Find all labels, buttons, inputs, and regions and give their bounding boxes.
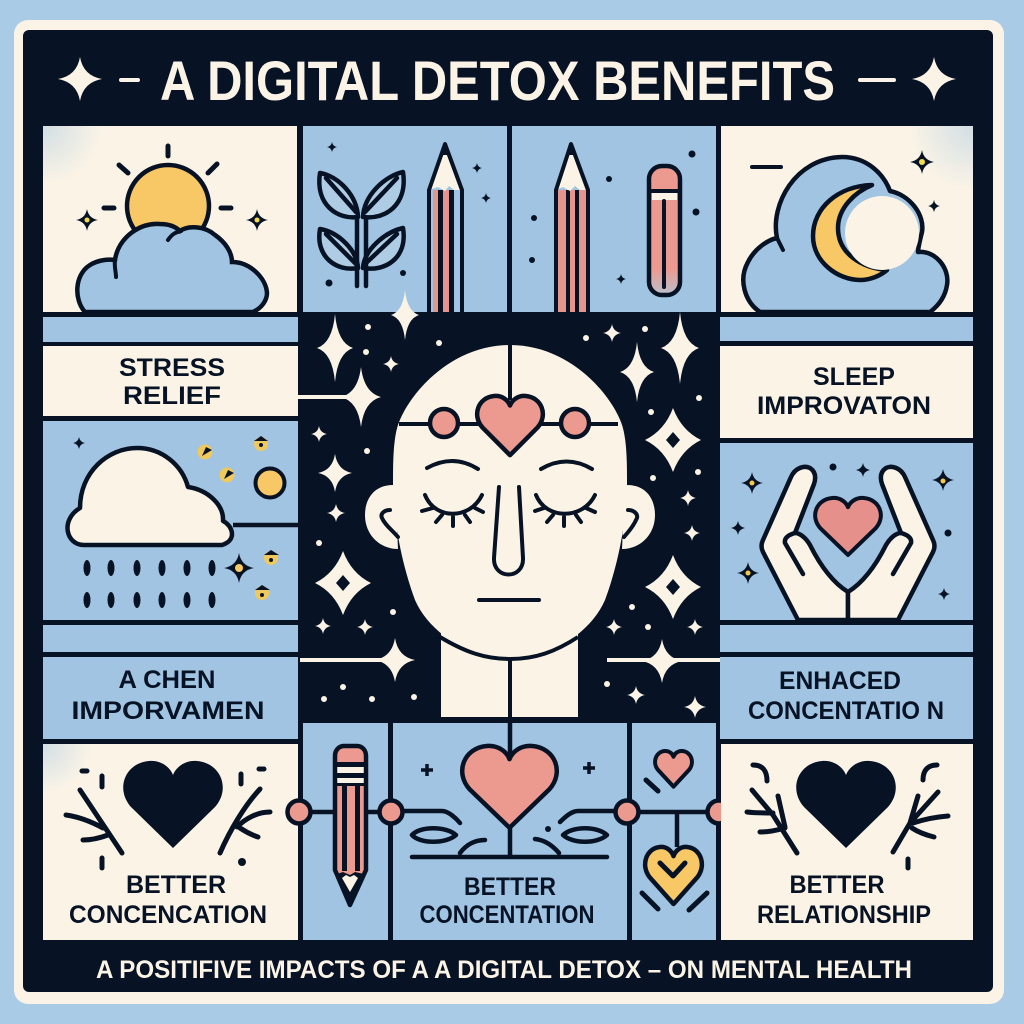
face <box>393 345 627 658</box>
icon: right twig <box>893 765 948 868</box>
panel: better relationship <box>721 744 973 940</box>
title decoration left <box>58 57 140 101</box>
icon: sun dot <box>256 468 284 498</box>
icon: left hand <box>762 467 848 620</box>
text: label: BETTER <box>790 871 884 899</box>
strip: right upper <box>720 317 973 341</box>
nose <box>494 487 523 574</box>
panel: rain cloud <box>43 421 298 620</box>
mouth <box>479 598 539 602</box>
icon: small marks <box>529 150 700 284</box>
icon: pencil <box>556 142 588 312</box>
icon: cloud <box>743 157 947 312</box>
strip: left upper <box>43 317 298 342</box>
text: label: BETTER <box>126 871 226 899</box>
icon: sparkles <box>76 209 268 231</box>
icon: full moon <box>845 196 919 270</box>
icon: yellow heart <box>645 847 702 904</box>
icon: left twig <box>747 765 797 853</box>
panel: bottom centre, heart <box>391 723 627 940</box>
icon: sun <box>127 165 209 247</box>
connector dots <box>288 800 730 824</box>
panel: better relationship: RELATIONSHIP <box>757 901 931 929</box>
brows <box>427 461 592 469</box>
icon: heart <box>815 498 881 555</box>
icon: pencil <box>335 746 366 905</box>
icon: small heart <box>655 751 692 787</box>
closed eyes <box>422 495 595 526</box>
icon: small marks <box>326 142 491 286</box>
panel: sun behind cloud <box>43 126 297 312</box>
icon: rain drops <box>84 560 216 608</box>
forehead heart <box>477 396 543 455</box>
icon: leaf sprig <box>319 172 404 286</box>
icon: cloud <box>68 448 232 545</box>
panel: bottom right, hearts <box>627 723 719 940</box>
footer caption: A POSITIFIVE IMPACTS OF A A DIGITAL DETOX – ON MENTAL HEALTH <box>96 956 912 984</box>
panel: moon and cloud <box>721 126 973 312</box>
neck line <box>508 655 512 724</box>
icon: right hand <box>848 467 934 620</box>
icon: sparkles <box>731 463 954 600</box>
strip: left lower <box>43 625 298 652</box>
panel: better concencation: CONCENCATION <box>69 901 267 929</box>
label: enhanced concentration: CONCENTATIO N <box>748 697 944 725</box>
icon: marks <box>750 150 940 212</box>
icon: pencil <box>429 142 462 312</box>
icon: heart <box>123 761 223 848</box>
icon: crescent moon <box>813 185 887 280</box>
label: stress relief <box>43 346 298 416</box>
ears <box>365 485 655 549</box>
panel: pencil and eraser <box>512 126 716 312</box>
text: label: BETTER <box>464 873 556 901</box>
central head illustration <box>365 345 655 724</box>
icon: left twig <box>66 771 122 868</box>
neck <box>441 620 578 717</box>
label: a chen improvamen: IMPORVAMEN <box>72 697 264 725</box>
panel: leaf and pencil <box>303 126 507 312</box>
label: sleep improvaton: SLEEP <box>813 363 895 391</box>
forehead dots <box>430 409 589 437</box>
starfield <box>298 290 720 718</box>
forehead lines <box>399 345 618 424</box>
icon: cloud <box>77 224 267 312</box>
icon: sparkles <box>73 436 279 600</box>
label: enhanced concentration <box>720 657 973 739</box>
panel: bottom pencil <box>299 723 391 940</box>
label: a chen improvamen <box>43 657 298 739</box>
title: A DIGITAL DETOX BENEFITS <box>160 49 835 112</box>
icon: eraser pen <box>649 166 680 295</box>
label: enhanced concentration: ENHACED <box>779 667 901 695</box>
title decoration right <box>858 57 956 101</box>
panel: bottom centre, heart: CONCENTATION <box>420 901 594 929</box>
panel: hands holding heart <box>720 443 973 620</box>
panel: better concencation <box>43 744 298 940</box>
jaw line <box>440 637 578 659</box>
strip: right lower <box>720 625 973 652</box>
icon: right twig <box>220 769 270 853</box>
connector line <box>299 810 391 814</box>
label: stress relief: RELIEF <box>123 382 221 410</box>
label: a chen improvamen: A CHEN <box>118 666 216 694</box>
icon: heart <box>796 761 896 848</box>
label: sleep improvaton: IMPROVATON <box>757 392 931 420</box>
icon: heart <box>462 746 557 828</box>
icon: leaves and lines <box>391 811 627 857</box>
ear lines <box>381 510 637 537</box>
label: sleep improvaton <box>720 346 973 438</box>
label: stress relief: STRESS <box>119 354 225 382</box>
